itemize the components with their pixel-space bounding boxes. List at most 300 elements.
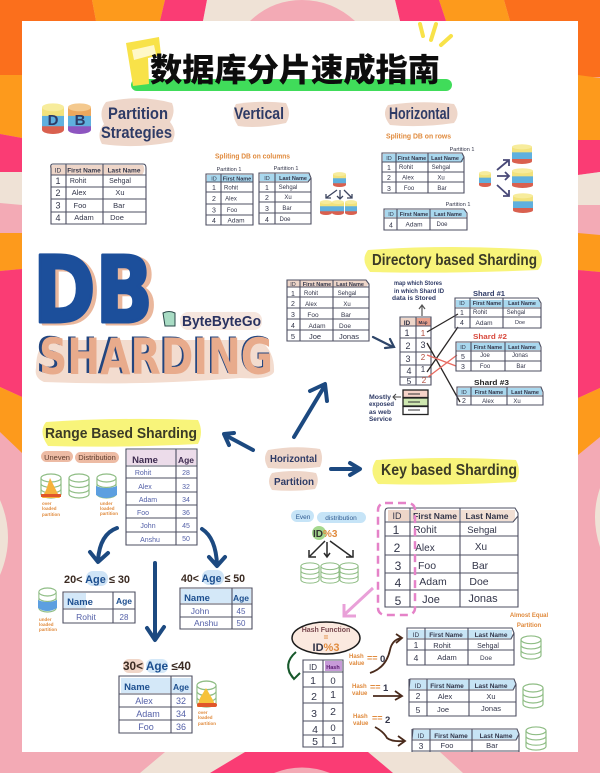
- table: hash values: 1: [330, 689, 336, 701]
- label: hash value 2: [353, 713, 390, 727]
- table: key based source: Jonas: [468, 593, 498, 605]
- table: shard 1: Adam: [476, 320, 492, 327]
- table: vertical partition 2: Partition 1: [274, 166, 298, 172]
- label: Uneven Distribution: Uneven: [44, 453, 70, 462]
- arrow: green curve: [288, 652, 300, 679]
- table: hash values: 1: [331, 736, 337, 747]
- table: base: 1: [55, 176, 61, 186]
- table: directory map: 1: [404, 328, 410, 338]
- table: vertical partition 2: 3: [265, 206, 269, 213]
- table: key based source: First Name: [413, 511, 457, 521]
- table: vertical partition 1: ID: [211, 176, 217, 182]
- table: vertical partition 2: ID: [264, 176, 270, 182]
- table: horizontal partition 2: Last Name: [434, 212, 462, 218]
- table: hash result 1: First Name: [430, 683, 464, 690]
- icon: DB cylinders: [42, 103, 91, 134]
- table: key based source: Doe: [469, 576, 489, 588]
- table: horizontal partition 2: Partition 1: [446, 202, 470, 208]
- table: key based source: 5: [395, 594, 402, 608]
- table: directory map: [400, 317, 431, 386]
- label: Almost Equal Partition: [510, 613, 548, 629]
- label: 40 < Age ≤ 50: 40< Age ≤ 50: [181, 573, 245, 585]
- logo: SHARDING: SHARDING: [36, 327, 272, 385]
- table: age 20 to 30: 28: [120, 613, 129, 622]
- label: Shard #1: Shard #1: [473, 289, 505, 298]
- note: map description: data is Stored: [392, 296, 436, 302]
- label: hash value 2: ==: [372, 713, 383, 723]
- table: directory source: Adam: [309, 323, 325, 330]
- table: key based source: 1: [393, 523, 400, 537]
- table: key based source: ID: [392, 511, 402, 521]
- table: directory map: 4: [406, 366, 412, 376]
- table: base: Rohit: [70, 178, 86, 185]
- table: hash values: 4: [312, 724, 318, 736]
- table: vertical partition 1: Rohit: [224, 186, 238, 192]
- hash function: [292, 622, 360, 654]
- arrow: hash 2: [375, 727, 405, 746]
- label: over loaded partition: loaded: [198, 715, 213, 720]
- table: vertical partition 1: 1: [212, 185, 216, 192]
- table: hash values: 3: [311, 708, 317, 720]
- table: base: 2: [55, 188, 61, 198]
- table: age 40 to 50: John: [191, 606, 209, 616]
- highlight: ID column: [378, 503, 415, 615]
- table: horizontal partition 1: 1: [387, 165, 391, 172]
- label: over loaded partition: over: [42, 501, 52, 506]
- label: over loaded partition: [198, 710, 216, 726]
- label: splitting on columns: Spliting DB on columns: [215, 154, 290, 160]
- label: Horizontal Partition: Partition: [274, 476, 314, 488]
- table: horizontal partition 1: Bar: [437, 186, 447, 192]
- table: horizontal partition 1: 2: [387, 175, 391, 182]
- table: hash result 2: 3: [419, 741, 424, 751]
- note: map description: map which Stores: [394, 281, 443, 287]
- label: under loaded partition: under: [100, 501, 113, 506]
- label: Shard #3: Shard #3: [474, 378, 509, 387]
- table: hash result 1: Xu: [486, 692, 496, 701]
- table: age 40 to 50: 45: [237, 607, 246, 616]
- note: web service: exposed: [369, 401, 394, 408]
- table: shard 1: [455, 298, 541, 328]
- table: shard 2: Bar: [516, 364, 526, 370]
- label: hash value 0: ==: [367, 653, 378, 663]
- table: shard 1: Doe: [515, 320, 525, 326]
- table: hash values: 2: [330, 706, 336, 718]
- table: directory source: Rohit: [304, 291, 318, 297]
- table: range source: 32: [182, 484, 190, 491]
- table: vertical partition 1: 3: [212, 208, 216, 214]
- arrow: to key based: [331, 463, 360, 475]
- table: hash result 0: [407, 628, 514, 665]
- table: hash result 2: Last Name: [480, 733, 513, 740]
- table: vertical partition 1: Alex: [225, 196, 237, 202]
- icon: vertical split cylinders: [320, 172, 357, 215]
- table: horizontal partition 1: Rohit: [399, 165, 413, 171]
- logo: DB: DB: [33, 237, 153, 344]
- table: horizontal partition 1: Partition 1: [450, 147, 474, 153]
- table: directory source: Jonas: [339, 332, 359, 341]
- table: vertical partition 2: Last Name: [279, 176, 307, 182]
- table: age 30 to 40: 36: [176, 722, 186, 732]
- label: hash value 0: value: [349, 661, 365, 667]
- table: vertical partition 1: Foo: [227, 208, 238, 214]
- arrow: hash 1: [373, 691, 402, 700]
- table: vertical partition 1: Partition 1: [217, 167, 241, 173]
- table: range source: Foo: [137, 510, 149, 517]
- table: vertical partition 2: Sehgal: [279, 185, 297, 191]
- table: hash result 2: ID: [418, 733, 425, 740]
- label: under loaded partition: under: [39, 617, 52, 622]
- table: shard 2: First Name: [474, 345, 502, 351]
- note: map description: in which Shard ID: [394, 289, 445, 295]
- table: directory map: Map: [418, 320, 428, 325]
- table: age 40 to 50: Name: [184, 593, 210, 604]
- icon: underloaded cylinder: [96, 474, 117, 498]
- table: shard 3: Last Name: [511, 390, 539, 396]
- table: shard 1: ID: [459, 301, 465, 307]
- table: horizontal partition 2: First Name: [400, 212, 428, 218]
- label: 20 < Age ≤ 30: 20< Age ≤ 30: [64, 574, 130, 586]
- table: directory source: Xu: [343, 302, 351, 308]
- label: over loaded partition: loaded: [42, 506, 57, 511]
- logo: DB: DB: [36, 239, 158, 346]
- label: under loaded partition: partition: [39, 627, 57, 632]
- hash function: =: [324, 633, 329, 642]
- label: hash value 0: [349, 653, 385, 667]
- icon: cylinder: [521, 636, 541, 659]
- note: web service: Service: [369, 416, 392, 423]
- icon: overloaded cylinder: [41, 474, 61, 498]
- label: Almost Equal Partition: Almost Equal: [510, 613, 548, 619]
- icon: cylinder: [523, 684, 543, 708]
- table: hash result 0: ID: [413, 632, 420, 639]
- heading: Partition Strategies: Partition: [108, 105, 168, 123]
- table: hash result 0: Last Name: [475, 632, 508, 639]
- table: directory source: Joe: [309, 332, 321, 341]
- table: base: Last Name: [108, 168, 141, 174]
- table: hash result 2: [412, 729, 519, 752]
- logo: SHARDING: SHARDING: [39, 328, 273, 386]
- table: vertical partition 2: Xu: [284, 195, 292, 201]
- table: hash result 1: 5: [416, 705, 421, 715]
- table: hash values: 0: [330, 723, 336, 734]
- table: shard 3: ID: [461, 390, 467, 396]
- arrow: to 30-40: [147, 563, 164, 640]
- table: vertical partition 2: Doe: [279, 217, 291, 223]
- table: age 30 to 40: Age: [173, 682, 189, 692]
- heading: Partition Strategies: [99, 98, 175, 146]
- table: shard 1: First Name: [473, 301, 501, 307]
- label: hash value 1: value: [352, 691, 368, 697]
- table: shard 3: First Name: [475, 390, 503, 396]
- heading: Partition Strategies: Strategies: [101, 124, 172, 142]
- table: base: Alex: [72, 188, 87, 197]
- table: hash result 0: First Name: [429, 632, 463, 639]
- label: hash value 2: value: [353, 721, 369, 727]
- table: range source: Alex: [138, 484, 152, 491]
- table: hash result 0: Sehgal: [477, 643, 499, 650]
- table: shard 3: Xu: [513, 399, 521, 405]
- heading: Horizontal: Horizontal: [389, 105, 450, 123]
- table: key based source: Foo: [418, 560, 436, 572]
- table: age 30 to 40: 34: [176, 709, 186, 719]
- table: hash result 1: [409, 679, 516, 716]
- icon: cylinder: [526, 727, 546, 750]
- table: age 20 to 30: Name: [67, 597, 93, 608]
- table: age 30 to 40: Foo: [138, 722, 154, 732]
- arrows: even fan-out: [309, 541, 353, 557]
- arrow: to 20-30: [90, 528, 117, 562]
- table: range source: Age: [178, 455, 194, 465]
- table: vertical partition 2: 4: [265, 217, 269, 224]
- label: 30 < Age ≤ 40: 30< Age ≤40: [123, 661, 191, 673]
- table: shard 2: Joe: [480, 353, 490, 359]
- table: age 30 to 40: 32: [176, 696, 186, 706]
- table: range source: 34: [182, 497, 190, 504]
- label: hash value 0: Hash: [349, 654, 364, 660]
- label: over loaded partition: partition: [42, 512, 60, 517]
- table: base: Adam: [74, 213, 94, 222]
- table: age 40 to 50: 50: [237, 619, 246, 628]
- table: directory map: 3: [405, 354, 411, 364]
- label: under loaded partition: [100, 501, 118, 516]
- table: shard 1: 1: [460, 310, 464, 317]
- title: 数据库分片速成指南: [150, 52, 440, 88]
- table: horizontal partition 2: ID: [388, 212, 394, 218]
- table: horizontal partition 1: Xu: [437, 176, 445, 182]
- table: directory map: 1: [421, 329, 426, 338]
- table: age 20 to 30: Age: [116, 596, 132, 606]
- table: directory source: Sehgal: [338, 291, 356, 297]
- table: range source: [126, 449, 197, 545]
- table: hash result 1: Joe: [437, 705, 449, 714]
- table: hash result 1: Alex: [438, 692, 453, 701]
- heading: Directory based Sharding: Directory based Sharding: [372, 252, 537, 269]
- arrow: to hash function: [344, 588, 373, 616]
- title: [126, 24, 452, 91]
- table: age 20 to 30: Rohit: [76, 612, 97, 622]
- note: web service: Mostly: [369, 394, 391, 401]
- arrow: to directory: [294, 384, 327, 437]
- table: base: First Name: [67, 168, 101, 174]
- table: age 30 to 40: Name: [124, 682, 150, 693]
- icon: DB cylinders: B: [75, 112, 86, 129]
- hash function: Hash Function: [302, 627, 350, 634]
- table: directory source: 1: [291, 291, 295, 298]
- label: hash value 2: Hash: [353, 714, 368, 720]
- table: horizontal partition 1: Last Name: [431, 156, 459, 162]
- table: vertical partition 2: Bar: [282, 206, 292, 212]
- arrow: up to note: [419, 305, 425, 316]
- table: directory source: Bar: [341, 312, 352, 319]
- table: shard 2: [456, 342, 541, 371]
- label: Uneven Distribution: Distribution: [78, 453, 116, 462]
- table: range source: 28: [182, 470, 190, 477]
- arrow: table to directory: [373, 337, 394, 348]
- table: base: Doe: [110, 213, 124, 222]
- label: splitting on rows: Spliting DB on rows: [386, 134, 451, 140]
- label: under loaded partition: loaded: [39, 622, 54, 627]
- table: age 30 to 40: Adam: [136, 709, 160, 719]
- table: shard 3: 2: [462, 398, 466, 405]
- icon: horizontal split cylinders: [479, 144, 533, 213]
- table: hash result 1: ID: [415, 683, 422, 690]
- connector lines: [427, 314, 460, 402]
- heading: Key based Sharding: [372, 458, 519, 485]
- table: hash result 0: Rohit: [433, 641, 452, 650]
- table: directory source: 2: [291, 301, 295, 308]
- table: vertical partition 1: 2: [212, 196, 216, 203]
- table: hash result 1: Jonas: [481, 704, 501, 713]
- label: hash value 2: 2: [385, 715, 390, 726]
- table: age 40 to 50: [180, 588, 252, 629]
- table: directory source: Alex: [305, 302, 317, 308]
- table: directory source: 5: [291, 332, 295, 341]
- table: vertical partition 1: [206, 167, 253, 225]
- table: hash result 2: First Name: [434, 733, 468, 740]
- table: vertical partition 1: First Name: [223, 176, 251, 182]
- table: key based source: 2: [394, 541, 401, 555]
- table: range source: John: [140, 523, 156, 530]
- table: range source: Adam: [139, 497, 157, 504]
- table: key based source: Bar: [472, 560, 489, 572]
- table: base: Sehgal: [109, 178, 131, 185]
- icon: normal cylinder: [69, 474, 89, 498]
- table: horizontal partition 1: Alex: [402, 176, 414, 182]
- table: directory source: Last Name: [336, 282, 364, 288]
- icon: server: [403, 390, 428, 414]
- table: key based source: Alex: [415, 543, 435, 554]
- arrow: to range: [224, 433, 253, 450]
- table: directory map: 2: [422, 376, 427, 385]
- icon: three cylinders: [301, 563, 358, 583]
- label: Horizontal Partition: Horizontal: [270, 453, 317, 465]
- hash function: ID%3: [313, 642, 339, 654]
- table: hash result 1: 2: [416, 691, 421, 701]
- table: directory map: 5: [407, 376, 412, 386]
- heading: Range Based Sharding: Range Based Sharding: [45, 425, 197, 442]
- table: age 20 to 30: [63, 592, 135, 623]
- note: web service: as web: [369, 409, 391, 416]
- table: base: Xu: [115, 188, 125, 197]
- table: shard 1: 4: [460, 320, 464, 327]
- table: age 30 to 40: Alex: [135, 696, 153, 706]
- note: map description: [392, 281, 445, 302]
- table: age 30 to 40: [119, 676, 192, 733]
- table: shard 3: Alex: [482, 399, 494, 405]
- table: vertical partition 2: 2: [265, 195, 269, 202]
- table: hash values: ID: [309, 663, 317, 672]
- table: base: ID: [55, 168, 62, 174]
- table: base: [50, 164, 146, 224]
- table: hash values: 0: [330, 676, 336, 687]
- table: vertical partition 1: 4: [212, 218, 216, 225]
- table: range source: Rohit: [135, 470, 151, 477]
- label: over loaded partition: partition: [198, 721, 216, 726]
- label: hash value 1: [352, 682, 389, 697]
- table: hash result 2: Bar: [486, 741, 498, 750]
- table: shard 2: 5: [461, 354, 465, 361]
- table: vertical partition 1: Adam: [228, 218, 244, 224]
- table: hash result 0: 4: [414, 653, 419, 663]
- table: shard 3: [457, 387, 543, 405]
- label: hash value 1: 1: [383, 683, 389, 694]
- label: hash value 1: Hash: [352, 684, 367, 690]
- table: hash values: 5: [312, 736, 318, 748]
- table: directory source: First Name: [303, 282, 331, 288]
- table: range source: 36: [182, 510, 190, 517]
- table: hash values: Hash: [326, 665, 340, 671]
- icon: underloaded cylinder: [38, 588, 57, 612]
- table: key based source: Rohit: [413, 525, 437, 536]
- table: range source: 45: [182, 523, 190, 530]
- table: hash result 0: 1: [414, 640, 419, 650]
- table: base: Bar: [113, 201, 125, 210]
- table: vertical partition 2: [259, 166, 311, 224]
- label: under loaded partition: partition: [100, 511, 118, 516]
- table: directory map: ID: [404, 320, 411, 327]
- table: horizontal partition 1: 3: [387, 186, 391, 193]
- table: key based source: 3: [395, 559, 402, 573]
- table: shard 2: Last Name: [508, 345, 536, 351]
- heading: Vertical: [233, 102, 289, 127]
- label: hash value 1: ==: [370, 682, 381, 692]
- icon: DB cylinders: D: [48, 112, 59, 129]
- table: directory map: 2: [405, 341, 411, 351]
- table: horizontal partition 1: First Name: [398, 156, 426, 162]
- heading: Directory based Sharding: [364, 247, 542, 273]
- label: Shard #2: Shard #2: [473, 332, 507, 341]
- table: key based source: Sehgal: [467, 525, 497, 536]
- table: directory map: 1: [421, 365, 426, 374]
- table: key based source: Joe: [422, 594, 440, 606]
- table: shard 2: ID: [460, 345, 466, 351]
- table: shard 2: Foo: [480, 364, 491, 370]
- table: hash result 0: Doe: [480, 655, 492, 662]
- table: base: Foo: [74, 201, 86, 210]
- table: range source: Name: [132, 455, 158, 466]
- heading: Horizontal: [385, 102, 458, 126]
- icon: ByteByteGo logo: [163, 312, 175, 326]
- label: hash value 0: 0: [380, 654, 385, 665]
- table: hash result 0: Adam: [437, 653, 457, 662]
- note: web service: [369, 394, 401, 423]
- table: horizontal partition 1: Sehgal: [432, 165, 450, 171]
- table: key based source: [385, 508, 518, 608]
- table: directory source: [287, 280, 369, 341]
- table: vertical partition 2: 1: [265, 185, 269, 192]
- label: Horizontal Partition: [265, 447, 322, 491]
- table: directory map: 3: [420, 340, 426, 350]
- heading: Key based Sharding: Key based Sharding: [381, 462, 517, 479]
- table: age 40 to 50: Anshu: [194, 618, 218, 628]
- table: horizontal partition 1: ID: [386, 156, 392, 162]
- label: Even distribution: [291, 510, 366, 523]
- table: range source: Anshu: [140, 537, 160, 544]
- table: directory source: 4: [291, 323, 295, 330]
- table: hash values: [303, 660, 343, 748]
- table: hash values: 1: [310, 675, 316, 687]
- label: under loaded partition: [39, 617, 57, 632]
- table: horizontal partition 2: Doe: [436, 222, 448, 228]
- table: hash values: 2: [311, 691, 317, 703]
- table: horizontal partition 2: [384, 202, 470, 230]
- table: age 40 to 50: Age: [233, 593, 249, 603]
- table: base: 3: [55, 200, 61, 210]
- table: key based source: Xu: [475, 542, 487, 553]
- table: directory source: Doe: [339, 323, 351, 330]
- heading: Range Based Sharding: [42, 419, 201, 447]
